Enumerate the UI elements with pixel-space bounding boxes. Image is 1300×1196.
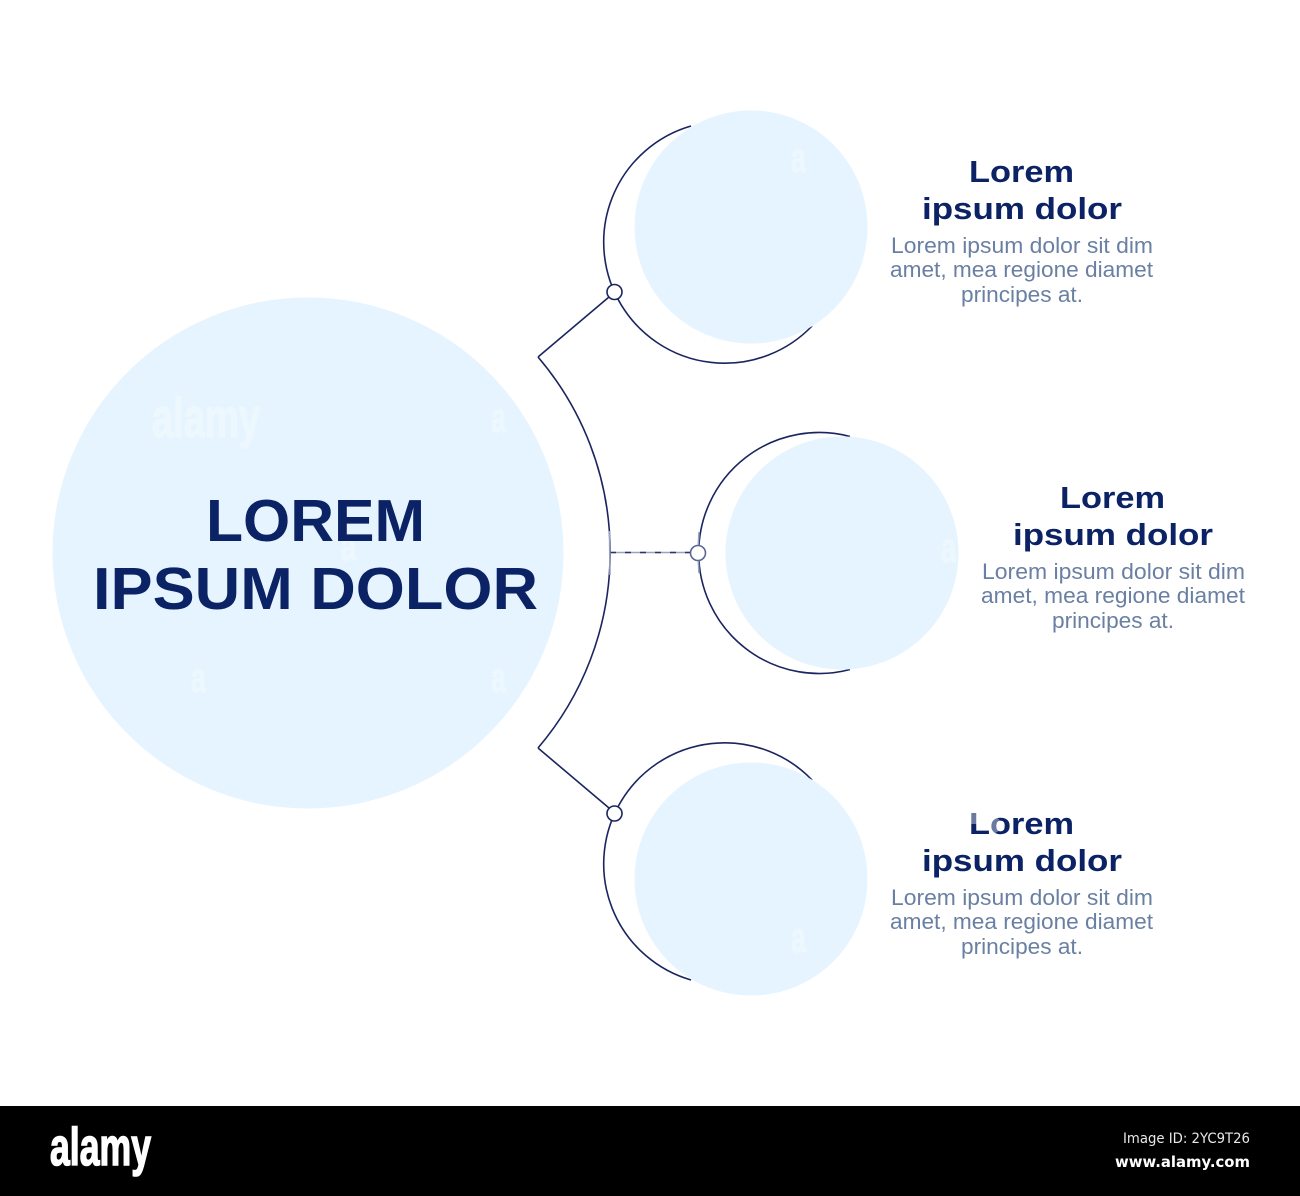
watermark in main circle: a bbox=[341, 522, 356, 569]
text block: middle item bbox=[981, 480, 1246, 633]
footer image id: Image ID: 2YC9T26 bbox=[1123, 1131, 1250, 1147]
panel: top item circle: a bbox=[791, 134, 806, 181]
footer logo: alamy bbox=[50, 1118, 151, 1177]
footer url: www.alamy.com bbox=[1115, 1153, 1250, 1171]
text block: top item: ipsum dolor bbox=[922, 191, 1122, 226]
text block: top item: principes at. bbox=[961, 282, 1083, 307]
watermark in main circle: a bbox=[491, 654, 506, 701]
text block: top item: Lorem ipsum dolor sit dim bbox=[891, 233, 1153, 258]
text block: middle item: Lorem ipsum dolor sit dim bbox=[982, 559, 1245, 584]
text block: top item: amet, mea regione diamet bbox=[890, 257, 1154, 282]
panel: top item circle bbox=[604, 110, 868, 363]
text block: middle item: Lorem bbox=[1060, 480, 1165, 515]
text block: bottom item: Lorem ipsum dolor sit dim bbox=[891, 885, 1153, 910]
panel: bottom item circle: a bbox=[791, 914, 806, 961]
panel: bottom item circle bbox=[604, 743, 868, 996]
node: middle bbox=[690, 546, 706, 560]
watermark in main circle: a bbox=[191, 654, 206, 701]
text block: bottom item: ipsum dolor bbox=[922, 843, 1122, 878]
text block: middle item: ipsum dolor bbox=[1013, 517, 1213, 552]
panel: middle item circle bbox=[690, 432, 958, 674]
main title: LOREM bbox=[206, 488, 425, 554]
text block: bottom item: principes at. bbox=[961, 934, 1083, 959]
text block: top item bbox=[890, 154, 1154, 307]
watermark in main circle: alamy bbox=[152, 386, 260, 449]
main title: IPSUM DOLOR bbox=[93, 556, 538, 622]
node: top bbox=[607, 284, 622, 300]
panel: main circle bbox=[52, 298, 564, 808]
text block: middle item: principes at. bbox=[1052, 608, 1174, 633]
text block: bottom item: amet, mea regione diamet bbox=[890, 909, 1154, 934]
watermark in main circle: a bbox=[491, 394, 506, 441]
text block: bottom item: Lorem bbox=[969, 806, 1074, 841]
watermark in main circle bbox=[152, 386, 506, 701]
panel: middle item circle: a bbox=[941, 524, 956, 571]
node: bottom bbox=[607, 806, 622, 821]
main title bbox=[93, 488, 538, 622]
connector: bracket arc with branches bbox=[538, 297, 691, 808]
text block: middle item: amet, mea regione diamet bbox=[981, 583, 1246, 608]
footer bar bbox=[0, 1106, 1300, 1196]
text block: top item: Lorem bbox=[969, 154, 1074, 189]
text block: bottom item bbox=[890, 806, 1154, 959]
